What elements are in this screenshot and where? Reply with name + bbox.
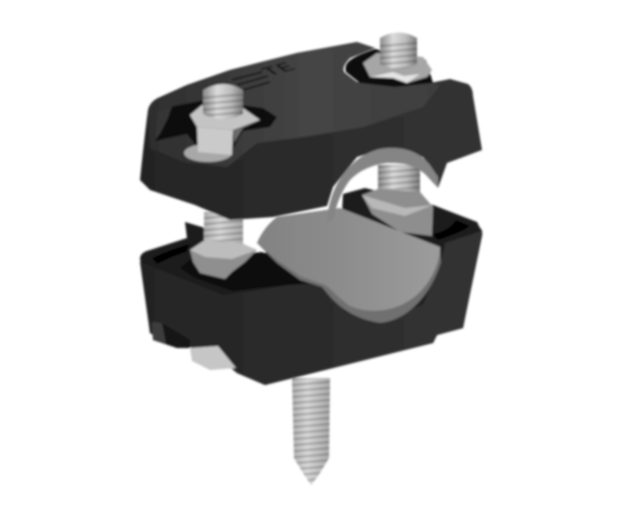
front top bolt [203,84,243,119]
upper clamp body [140,42,482,220]
front top washer [184,144,232,162]
square washer below clamp [190,346,236,370]
lower rear nut highlight [362,195,433,216]
nut pocket [180,252,318,291]
front bolt shaft [204,212,243,256]
lower gasket [257,208,441,323]
lower screw [292,378,330,485]
rear slot [432,220,470,240]
lower rear nut [362,189,433,236]
top-right pocket [345,49,433,87]
gasket inner surface [257,208,440,311]
rear bolt lower shaft [378,165,420,210]
lower clamp rear rim [340,188,482,270]
underside recess bevel [152,322,166,344]
lower clamp body [140,222,482,385]
top-left pocket [155,100,277,150]
pocket side wall [155,106,172,140]
front nut [190,240,257,279]
lower clamp front face [140,231,482,385]
rear top bolt [380,32,417,69]
right face crease [433,231,482,343]
logo bars [232,72,270,90]
brand mark: TE [257,59,301,78]
front top nut [190,105,260,155]
upper gasket arc [327,148,438,222]
left slot [152,244,190,264]
rear top nut [363,53,432,83]
underside recess [152,322,190,348]
upper clamp top face [148,42,440,167]
